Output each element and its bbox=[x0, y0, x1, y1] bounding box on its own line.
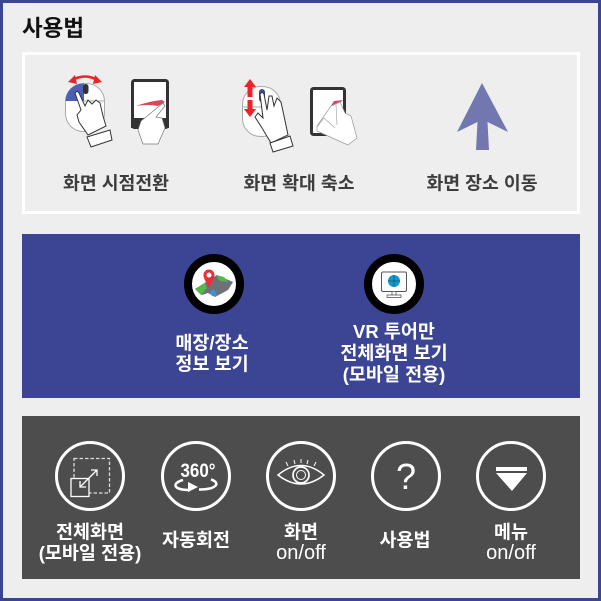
title: 사용법 bbox=[22, 16, 84, 41]
icon: map pin bbox=[188, 258, 240, 310]
icon: 360 rotate bbox=[162, 442, 230, 510]
icon: tablet pinch bbox=[312, 88, 357, 145]
label: screen on/off: on/off bbox=[276, 542, 326, 564]
panel: screen controls bbox=[24, 54, 578, 212]
label: zoom: 화면 확대 축소 bbox=[243, 172, 355, 194]
icon: menu bbox=[478, 442, 544, 510]
icon: mouse rotate bbox=[66, 75, 112, 147]
panel: VR info bbox=[22, 234, 580, 398]
label: usage: 사용법 bbox=[379, 530, 431, 550]
label: mobile only: (모바일 전용) bbox=[343, 364, 445, 385]
icon: help: ? bbox=[396, 456, 416, 497]
icon: help bbox=[372, 442, 440, 510]
icon: monitor globe bbox=[368, 258, 420, 310]
label: VR tour only: VR 투어만 bbox=[353, 321, 435, 342]
label: VR fullscreen: 전체화면 보기 bbox=[340, 342, 448, 364]
label: fullscreen: 전체화면 bbox=[56, 522, 124, 542]
icon: fullscreen bbox=[56, 442, 124, 510]
label: menu: 메뉴 bbox=[494, 522, 528, 542]
label: store info: 매장/장소 bbox=[175, 332, 249, 354]
label: screen: 화면 bbox=[284, 522, 318, 542]
icon: mouse zoom bbox=[242, 79, 293, 152]
icon: eye bbox=[268, 442, 334, 510]
label: menu on/off: on/off bbox=[486, 542, 536, 564]
icon: tablet swipe bbox=[131, 80, 169, 144]
icon: 360 rotate: 360° bbox=[180, 461, 216, 482]
panel: toolbar bbox=[22, 416, 580, 579]
label: auto rotate: 자동회전 bbox=[162, 530, 230, 550]
label: mobile only: (모바일 전용) bbox=[39, 542, 141, 564]
label: store info line 2: 정보 보기 bbox=[175, 354, 249, 374]
icon: move arrow bbox=[457, 83, 508, 150]
label: view rotate: 화면 시점전환 bbox=[63, 172, 169, 194]
label: move: 화면 장소 이동 bbox=[426, 172, 538, 194]
